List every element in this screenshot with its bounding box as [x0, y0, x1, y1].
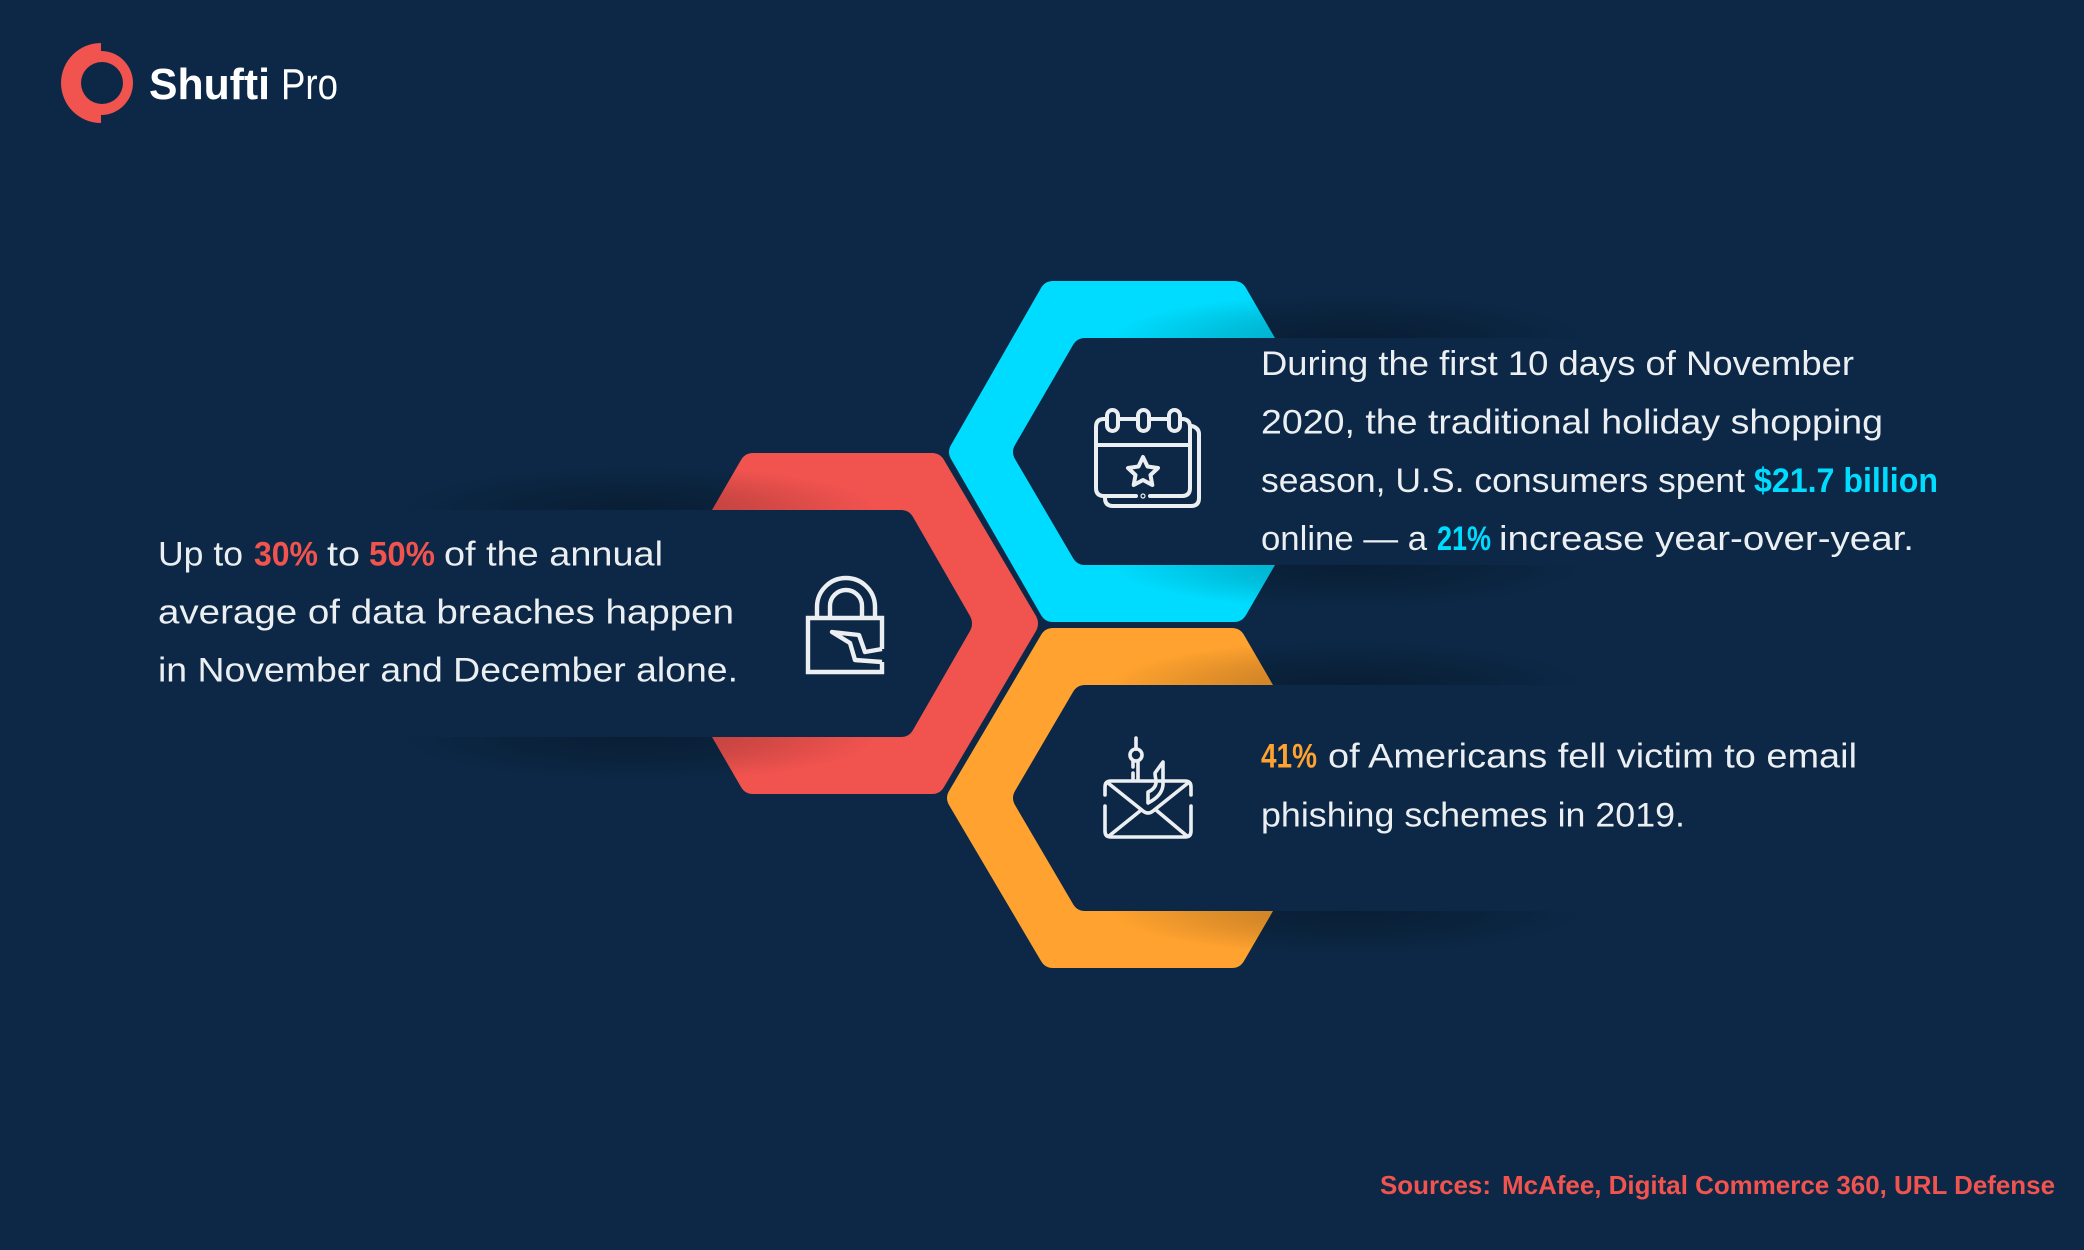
stat text: holiday spending [1261, 345, 1938, 558]
stat text: phishing: 41% [1261, 738, 1317, 776]
stat text: holiday spending: 2020, the traditional holiday shopping [1261, 404, 1883, 442]
stat text: data breaches: Up to [158, 536, 243, 574]
sources line: McAfee, Digital Commerce 360, URL Defense [1502, 1170, 2055, 1200]
stat text: holiday spending: season, U.S. consumers spent [1261, 462, 1746, 500]
sources line: Sources: [1380, 1170, 1491, 1200]
stat text: data breaches: 50% [369, 536, 435, 574]
stat text: holiday spending: online — a [1261, 520, 1427, 558]
panel: orange hexagon phishing stat [947, 628, 1857, 968]
stat text: holiday spending: increase year-over-year. [1499, 520, 1914, 558]
logo: Shufti Pro [61, 43, 338, 123]
stat text: holiday spending: During the first 10 days of November [1261, 345, 1854, 383]
stat text: data breaches: average of data breaches happen [158, 594, 734, 632]
red hexagon ring [712, 453, 1038, 794]
stat text: holiday spending: $21.7 billion [1754, 462, 1938, 500]
logo wordmark: Pro [281, 60, 338, 109]
panel: blue hexagon calendar stat [949, 281, 1938, 622]
stat text: holiday spending: 21% [1437, 520, 1491, 558]
panel: red hexagon breach stat [158, 453, 1038, 794]
orange hexagon ring [947, 628, 1273, 968]
stat text: data breaches: of the annual [444, 536, 663, 574]
icon: envelope with fish hook [1105, 738, 1191, 837]
stat text: data breaches: 30% [254, 536, 318, 574]
stat text: phishing: phishing schemes in 2019. [1261, 796, 1685, 834]
logo wordmark [149, 60, 338, 109]
stat text: data breaches: to [327, 536, 360, 574]
logo wordmark: Shufti [149, 60, 270, 109]
stat text: data breaches [158, 536, 738, 690]
stat text: data breaches: in November and December alone. [158, 652, 738, 690]
icon: broken padlock [808, 578, 882, 672]
logo ring [61, 43, 133, 123]
stat text: phishing: of Americans fell victim to email [1328, 738, 1857, 776]
icon: calendar with star [1096, 410, 1199, 506]
blue hexagon ring [949, 281, 1275, 622]
stat text: phishing [1261, 738, 1857, 834]
